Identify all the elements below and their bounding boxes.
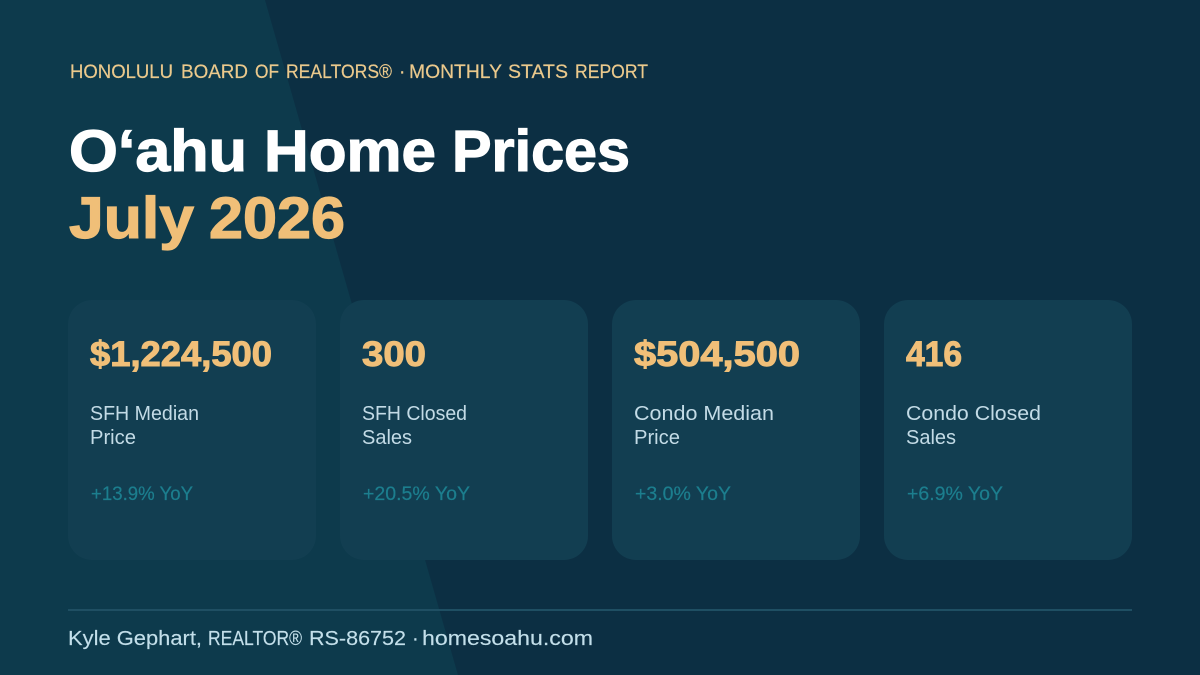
stat label: Price bbox=[90, 427, 136, 449]
eyebrow: report source: MONTHLY bbox=[409, 62, 502, 83]
year-over-year change: +3.0% YoY bbox=[635, 484, 731, 505]
stat value: $504,500 bbox=[634, 335, 800, 374]
footer: author credit: homesoahu.com bbox=[422, 627, 593, 650]
panel: SFH closed sales bbox=[340, 300, 588, 560]
title: Prices bbox=[452, 119, 630, 184]
year-over-year change: +20.5% YoY bbox=[363, 484, 470, 505]
year-over-year change: +6.9% YoY bbox=[907, 484, 1003, 505]
eyebrow: report source: STATS bbox=[508, 62, 568, 83]
year-over-year change: +13.9% YoY bbox=[91, 484, 193, 505]
footer: author credit: RS-86752 bbox=[309, 627, 406, 650]
eyebrow: report source: OF bbox=[255, 62, 279, 83]
footer: author credit: REALTOR® bbox=[208, 627, 302, 650]
title: O‘ahu bbox=[69, 119, 247, 184]
panel: SFH median price bbox=[68, 300, 316, 560]
panel: condo median price bbox=[612, 300, 860, 560]
eyebrow: report source: REPORT bbox=[575, 62, 648, 83]
stat label: SFH Median bbox=[90, 403, 199, 425]
stat label: Condo Closed bbox=[906, 403, 1041, 425]
eyebrow: report source: · bbox=[399, 62, 405, 83]
stat value: 416 bbox=[906, 335, 962, 374]
title: Home bbox=[264, 119, 436, 184]
stat label: Sales bbox=[362, 427, 412, 449]
subtitle: month: 2026 bbox=[209, 186, 345, 251]
stat label: Price bbox=[634, 427, 680, 449]
eyebrow: report source: REALTORS® bbox=[286, 62, 392, 83]
stat label: SFH Closed bbox=[362, 403, 467, 425]
eyebrow: report source: BOARD bbox=[181, 62, 248, 83]
panel: condo closed sales bbox=[884, 300, 1132, 560]
stat value: 300 bbox=[362, 335, 426, 374]
footer: author credit: · bbox=[412, 627, 419, 650]
eyebrow: report source: HONOLULU bbox=[70, 62, 173, 83]
stat label: Sales bbox=[906, 427, 956, 449]
subtitle: month: July bbox=[69, 186, 194, 251]
background teal diagonal panel bbox=[0, 0, 458, 675]
footer: author credit: Kyle Gephart, bbox=[68, 627, 202, 650]
stat value: $1,224,500 bbox=[90, 335, 272, 374]
stat label: Condo Median bbox=[634, 403, 774, 425]
